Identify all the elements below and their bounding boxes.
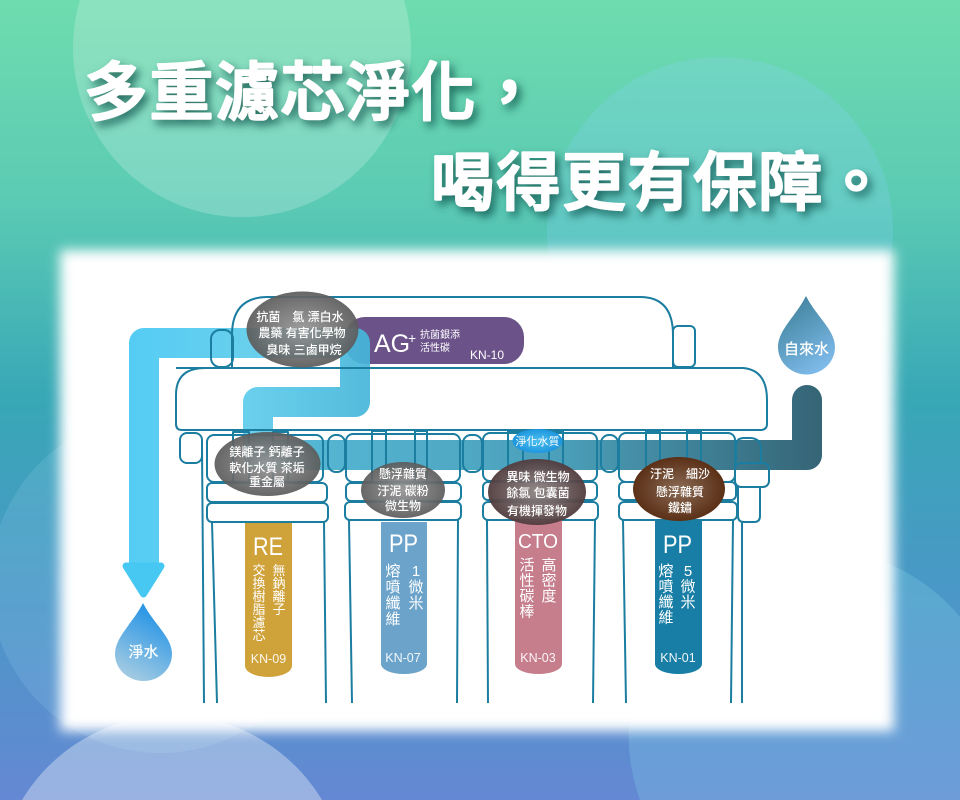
callout: CTO removes: 有機揮發物 <box>507 503 567 518</box>
filter bar: PP 5 micron KN-01: 維 <box>658 610 674 626</box>
filter bar: CTO KN-03: 高 <box>541 557 557 574</box>
filter bar: PP 1 micron KN-07: 米 <box>408 595 424 612</box>
filter bar: PP 1 micron KN-07: 1 <box>412 563 420 580</box>
filter bar: PP 5 micron KN-01: 微 <box>680 578 696 596</box>
filter bar: RE KN-09: 脂 <box>252 602 266 617</box>
filter bar: CTO KN-03: 棒 <box>519 604 535 620</box>
icon: purified water drop <box>115 603 172 681</box>
filter bar: PP 5 micron KN-01 <box>655 521 702 674</box>
filter bar: PP 5 micron KN-01: 纖 <box>658 594 674 611</box>
diagram: filter housing outlines <box>176 297 769 703</box>
filter bar: PP 5 micron KN-01: 米 <box>680 594 696 611</box>
callout: PP 1 micron removes: 汙泥 碳粉 <box>377 483 429 498</box>
filter bar: PP 5 micron KN-01: KN-01 <box>660 651 696 665</box>
callout: AG+ removes <box>246 292 358 368</box>
filter bar: RE KN-09: 芯 <box>252 628 266 643</box>
callout: PP 1 micron removes <box>361 462 445 518</box>
icon: purified water drop: 淨水 <box>128 644 159 661</box>
callout: purified water quality <box>512 429 562 453</box>
filter bar: RE KN-09: 樹 <box>252 589 266 604</box>
icon: tap water drop <box>778 296 835 374</box>
callout: PP 5 micron removes: 汙泥 細沙 <box>650 467 710 481</box>
filter bar: PP 1 micron KN-07: PP <box>389 530 418 558</box>
filter bar: PP 1 micron KN-07: KN-07 <box>385 651 421 665</box>
callout: AG+ removes: 抗菌 氯 漂白水 <box>256 309 344 324</box>
filter bar: PP 5 micron KN-01: 熔 <box>658 563 674 580</box>
callout: PP 5 micron removes <box>633 457 725 521</box>
panel: white diagram area <box>60 250 894 731</box>
filter bar: CTO KN-03: KN-03 <box>520 651 556 665</box>
filter bar: PP 1 micron KN-07: 噴 <box>385 579 401 596</box>
callout: RE removes: 鎂離子 鈣離子 <box>229 444 305 459</box>
icon: tap water drop: 自來水 <box>784 341 829 358</box>
panel: AG+ filter label: AG <box>374 330 410 358</box>
callout: CTO removes <box>488 459 586 525</box>
filter bar: CTO KN-03: CTO <box>518 531 558 553</box>
filter bar: RE KN-09: 離 <box>272 589 286 604</box>
filter bar: CTO KN-03: 密 <box>541 572 557 590</box>
filter bar: PP 5 micron KN-01: 噴 <box>658 578 674 596</box>
panel: AG+ filter label: 抗菌銀添 <box>420 328 460 341</box>
filter bar: CTO KN-03: 碳 <box>519 588 535 605</box>
filter bar: RE KN-09 <box>245 523 292 677</box>
filter bar: RE KN-09: RE <box>253 533 283 561</box>
callout: RE removes: 軟化水質 茶垢 <box>229 460 305 475</box>
panel: AG+ filter label: 活性碳 <box>420 341 450 354</box>
arrow: purified water pipe <box>126 343 355 594</box>
filter bar: CTO KN-03: 性 <box>519 572 535 590</box>
callout: AG+ removes: 農藥 有害化學物 <box>258 325 346 340</box>
callout: PP 1 micron removes: 懸浮雜質 <box>379 466 427 481</box>
filter bar: PP 5 micron KN-01: 5 <box>684 563 692 580</box>
filter bar: RE KN-09: 換 <box>252 576 266 591</box>
callout: PP 5 micron removes: 懸浮雜質 <box>656 484 704 499</box>
filter bar: RE KN-09: 鈉 <box>272 576 286 591</box>
callout: RE removes <box>214 432 320 496</box>
filter bar: RE KN-09: 子 <box>272 602 286 617</box>
filter bar: PP 1 micron KN-07: 維 <box>385 611 401 628</box>
filter bar: PP 1 micron KN-07 <box>381 522 427 674</box>
arrow: raw water pipe <box>258 400 807 455</box>
filter bar: CTO KN-03: 度 <box>541 588 557 605</box>
callout: purified water quality: 淨化水質 <box>516 434 560 448</box>
filter bar: RE KN-09: 交 <box>252 563 266 578</box>
filter bar: PP 1 micron KN-07: 微 <box>408 579 424 596</box>
filter bar: RE KN-09: KN-09 <box>251 652 286 666</box>
title line 1: 多重濾芯淨化， <box>84 57 542 129</box>
callout: CTO removes: 異味 微生物 <box>506 469 570 484</box>
callout: RE removes: 重金屬 <box>249 474 285 489</box>
panel: AG+ filter label <box>345 317 524 364</box>
filter bar: CTO KN-03 <box>515 520 562 674</box>
filter bar: RE KN-09: 濾 <box>252 615 266 630</box>
callout: PP 1 micron removes: 微生物 <box>385 498 421 513</box>
filter bar: RE KN-09: 無 <box>272 563 286 578</box>
panel: AG+ filter label: + <box>408 330 416 346</box>
callout: PP 5 micron removes: 鐵鏽 <box>668 500 692 515</box>
filter bar: PP 1 micron KN-07: 纖 <box>385 595 401 612</box>
panel: AG+ filter label: KN-10 <box>470 348 504 362</box>
filter bar: PP 1 micron KN-07: 熔 <box>385 563 401 580</box>
title line 2: 喝得更有保障。 <box>431 147 890 219</box>
filter bar: CTO KN-03: 活 <box>519 557 535 574</box>
callout: AG+ removes: 臭味 三鹵甲烷 <box>266 342 342 357</box>
callout: CTO removes: 餘氯 包囊菌 <box>506 485 570 500</box>
filter bar: PP 5 micron KN-01: PP <box>663 531 692 559</box>
